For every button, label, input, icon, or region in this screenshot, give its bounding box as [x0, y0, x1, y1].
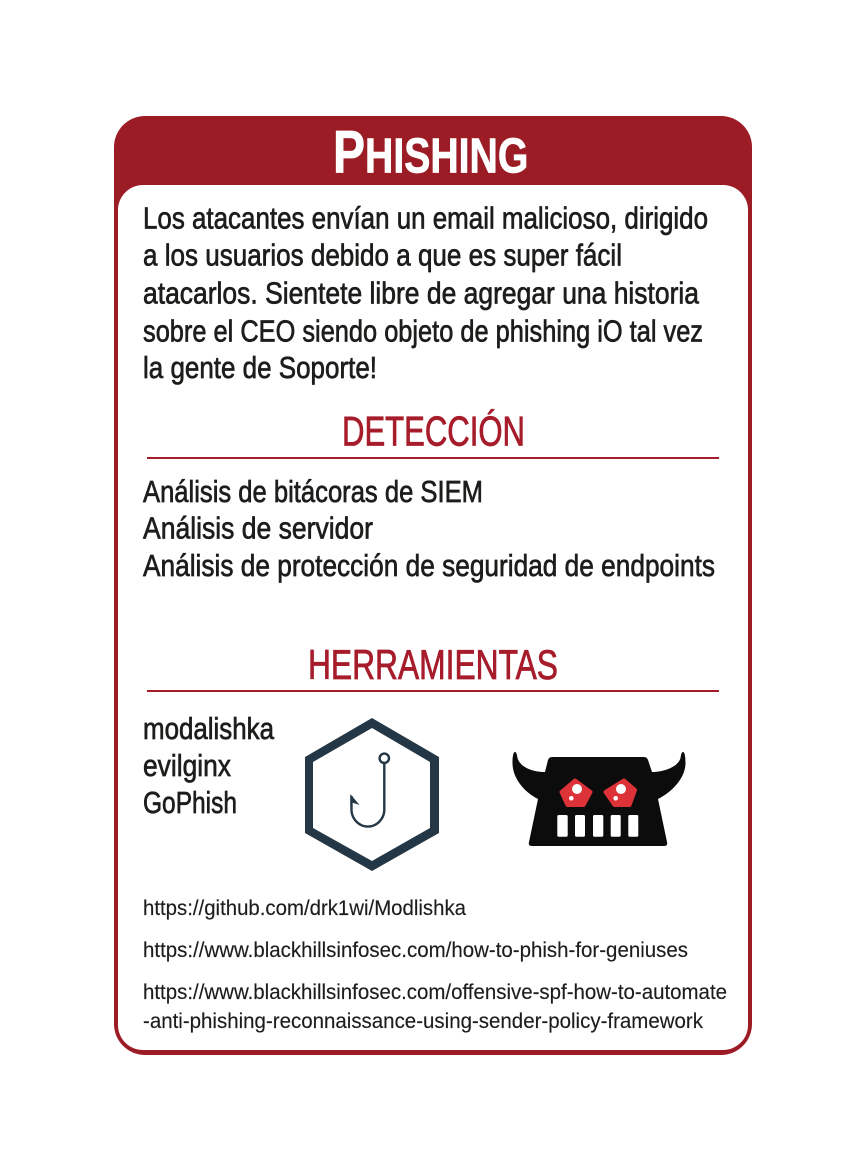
text block: description	[143, 200, 708, 385]
heading: herramientas: HERRAMIENTAS	[308, 641, 558, 688]
text block: detection list: Análisis de bitácoras de SIEM	[143, 474, 483, 509]
text block: tools list: modalishka	[143, 711, 275, 746]
text block: description: Los atacantes envían un email malicioso, dirigido	[143, 200, 708, 236]
icon: hexagon with fishing hook	[305, 718, 439, 871]
left eye	[562, 780, 590, 805]
text block: links	[143, 896, 727, 1033]
text block: description: sobre el CEO siendo objeto de phishing iO tal vez	[143, 314, 703, 348]
card	[114, 116, 752, 1055]
text block: links: https://github.com/drk1wi/Modlishka	[143, 896, 466, 920]
right eye	[606, 780, 635, 805]
text block: detection list	[143, 474, 715, 583]
text block: tools list: evilginx	[143, 748, 231, 783]
title: PHISHING	[333, 118, 528, 186]
heading: detección: DETECCIÓN	[342, 408, 525, 454]
text block: tools list	[143, 711, 275, 820]
eye highlights	[569, 784, 626, 801]
text block: detection list: Análisis de protección de seguridad de endpoints	[143, 548, 715, 583]
text block: links: -anti-phishing-reconnaissance-using-sender-policy-framework	[143, 1009, 703, 1033]
text block: detection list: Análisis de servidor	[143, 510, 373, 546]
text block: tools list: GoPhish	[143, 785, 237, 820]
icon: horned monster	[512, 752, 686, 846]
panel: card body	[118, 185, 748, 1050]
text block: description: la gente de Soporte!	[143, 350, 377, 385]
text block: description: a los usuarios debido a que es super fácil	[143, 238, 622, 272]
text block: links: https://www.blackhillsinfosec.com/offensive-spf-how-to-automate	[143, 980, 727, 1004]
text block: description: atacarlos. Sientete libre de agregar una historia	[143, 276, 700, 310]
text block: links: https://www.blackhillsinfosec.com/how-to-phish-for-geniuses	[143, 938, 688, 962]
teeth	[557, 815, 638, 837]
